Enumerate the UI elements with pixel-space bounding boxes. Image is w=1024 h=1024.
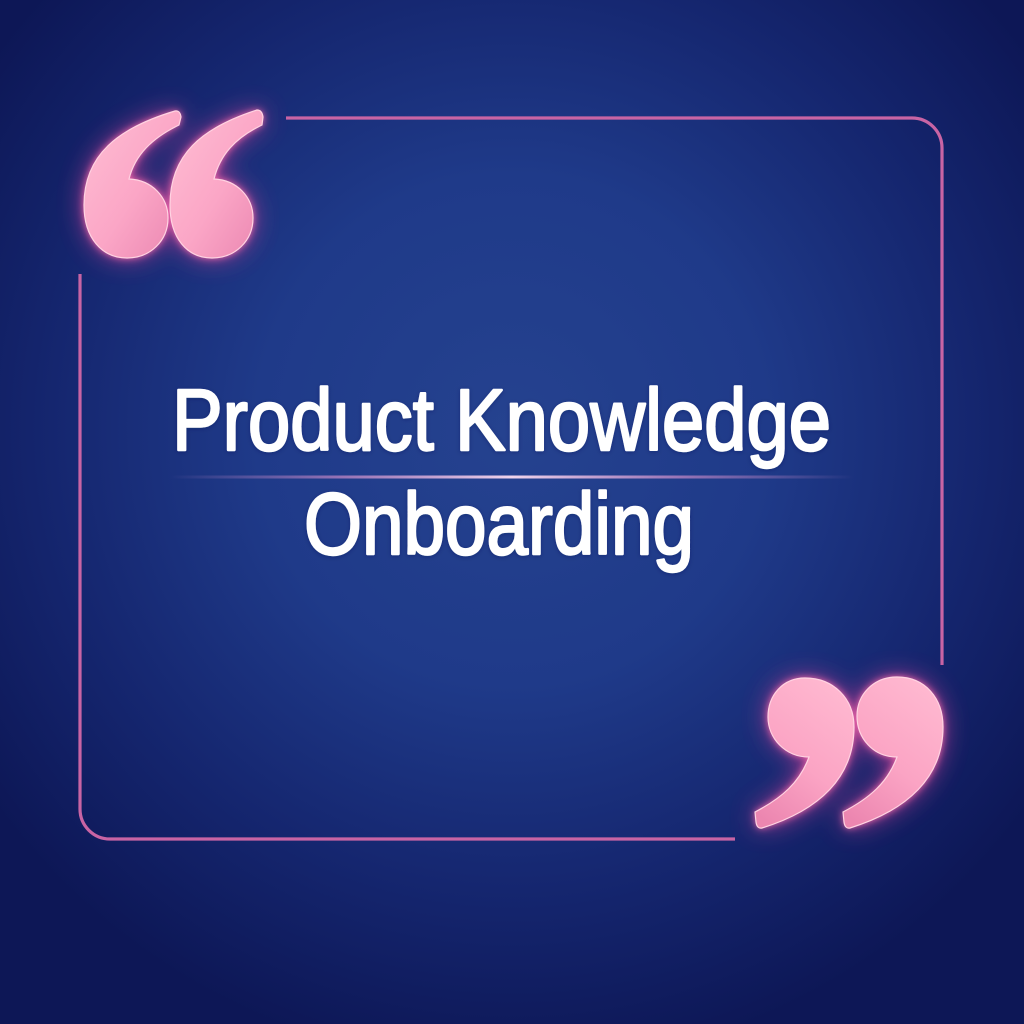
title bbox=[172, 372, 831, 573]
title: Product Knowledge bbox=[172, 372, 831, 469]
title: Onboarding bbox=[304, 476, 694, 573]
icon: opening quotation mark bbox=[84, 110, 263, 258]
title divider bbox=[170, 476, 854, 478]
quote frame bbox=[80, 118, 942, 839]
icon: closing quotation mark bbox=[755, 677, 943, 828]
